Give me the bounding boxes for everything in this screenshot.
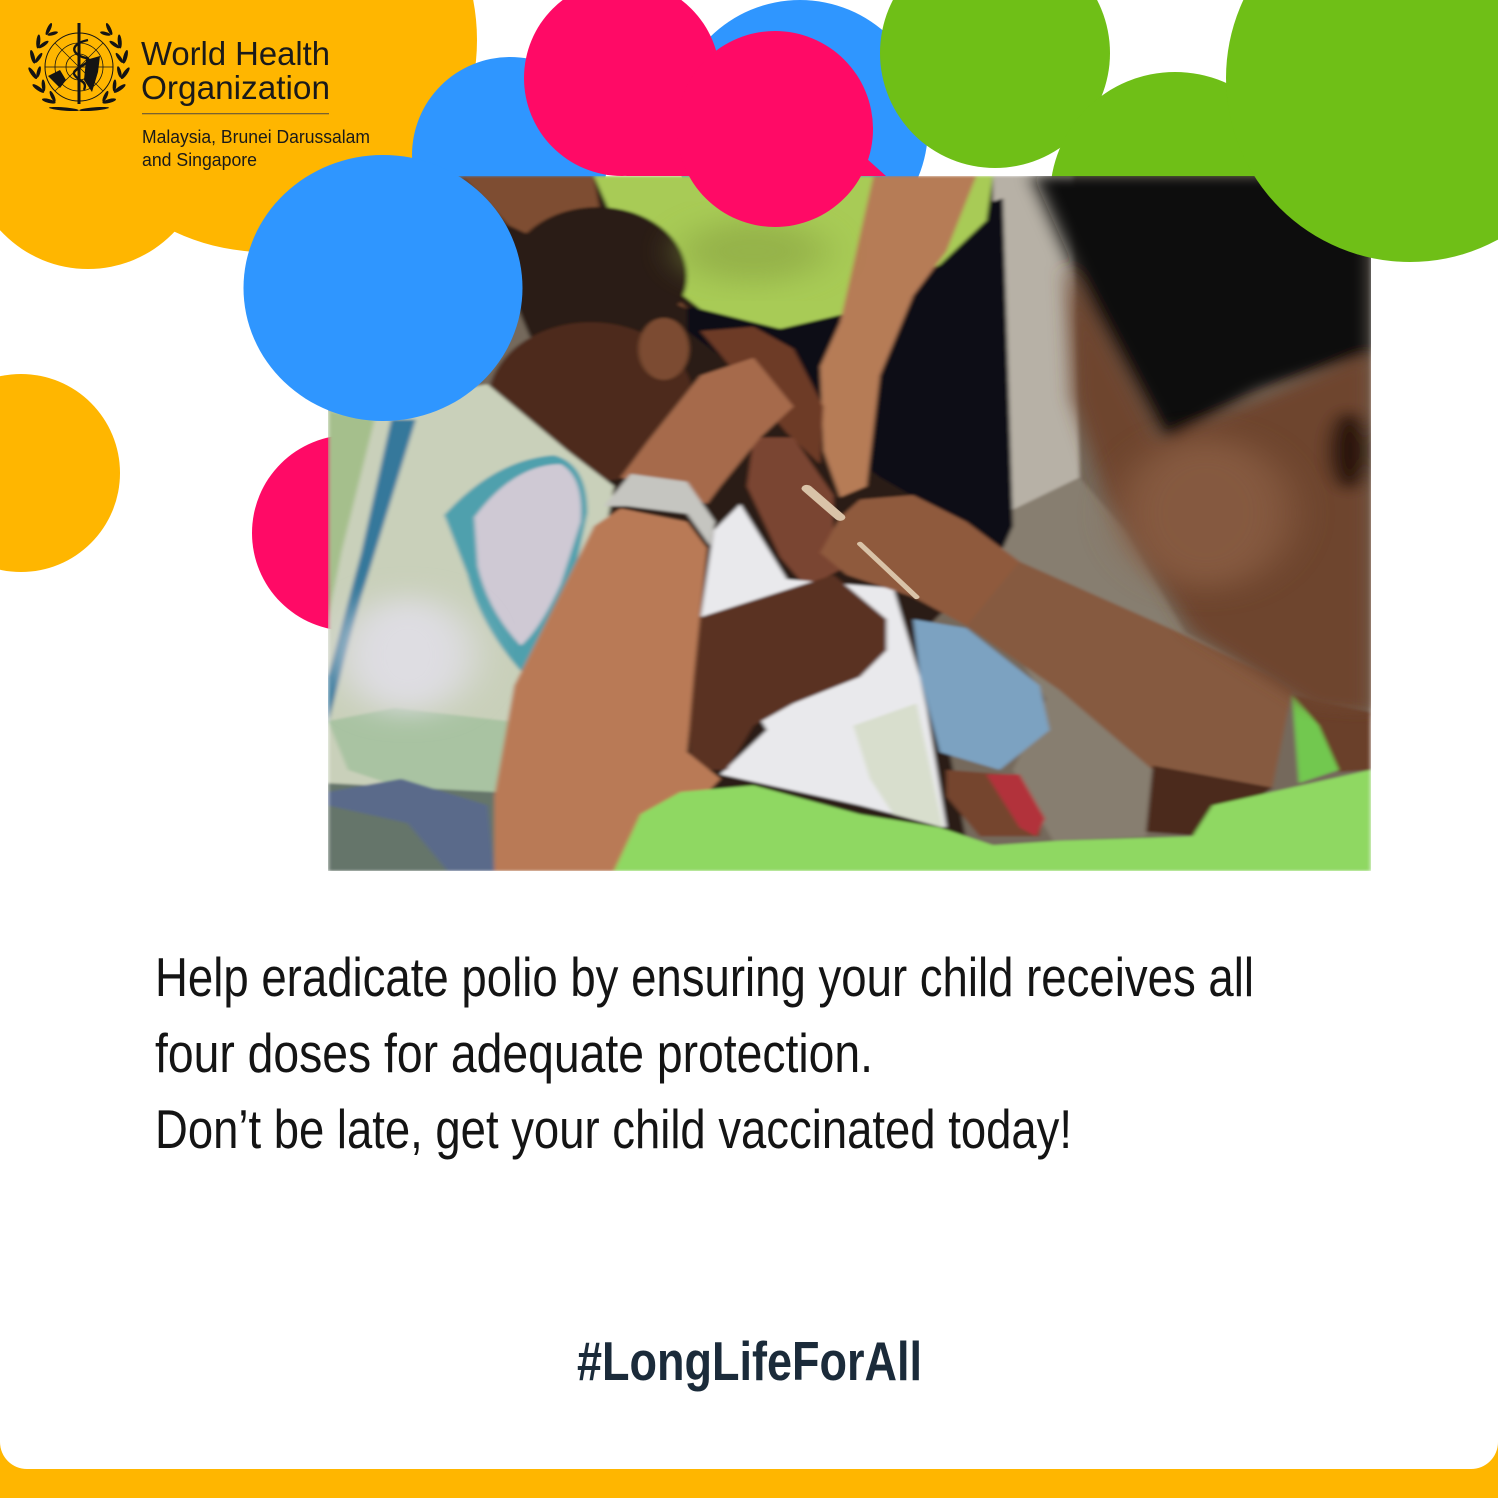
foreground green circle — [1226, 0, 1498, 262]
circles behind the photo — [252, 0, 1300, 631]
photo: health worker vaccinating a child — [328, 176, 1371, 871]
foreground blue circle — [244, 155, 522, 421]
logo wordmark: and Singapore — [142, 150, 257, 170]
syringe — [807, 488, 917, 597]
yellow decorative circles — [0, 0, 477, 572]
logo wordmark — [141, 35, 370, 170]
hashtag: #LongLifeForAll — [577, 1330, 922, 1392]
main message text: Don’t be late, get your child vaccinated today! — [155, 1098, 1072, 1160]
main message text — [155, 946, 1254, 1160]
bottom yellow band with rounded white corners — [0, 1380, 1498, 1498]
main message text: Help eradicate polio by ensuring your child receives all — [155, 946, 1254, 1008]
logo wordmark: Organization — [141, 69, 330, 106]
WHO logo — [27, 22, 370, 170]
logo wordmark: World Health — [141, 35, 330, 72]
main message text: four doses for adequate protection. — [155, 1022, 873, 1084]
logo wordmark: Malaysia, Brunei Darussalam — [142, 127, 370, 147]
foreground pink circle — [677, 31, 873, 227]
shadowed area behind the figures — [461, 176, 1006, 871]
icon: WHO emblem — [27, 22, 131, 112]
